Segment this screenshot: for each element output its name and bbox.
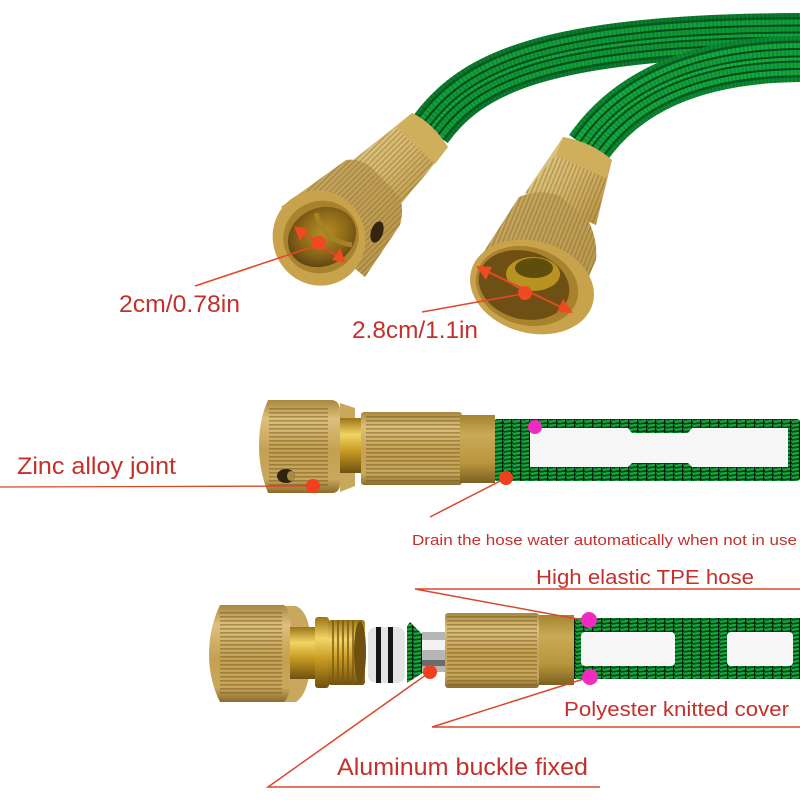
leader line [0, 486, 312, 487]
aluminum buckle [422, 632, 448, 672]
threaded fitting [290, 617, 366, 688]
leader line [430, 478, 506, 517]
dot [306, 479, 320, 493]
hose: front right [588, 59, 800, 148]
label: 2.8cm: 2.8cm/1.1in [352, 317, 478, 344]
dot [581, 612, 597, 628]
hose: back left [430, 35, 800, 130]
callout: zinc alloy joint [0, 453, 320, 493]
label: 2cm: 2cm/0.78in [119, 291, 240, 318]
arrowheads and dot [294, 226, 346, 263]
label: Aluminum buckle fixed [337, 754, 588, 781]
label: Polyester knitted cover [564, 699, 789, 721]
callout: 2.8cm diameter [352, 266, 573, 344]
collar [209, 605, 311, 702]
assembled connector and cutaway hose [259, 400, 800, 493]
leader line and arrows [422, 268, 569, 312]
inner tube windows [581, 632, 793, 666]
label: Drain the hose water automatically when not in use [412, 533, 797, 549]
arrowheads and dot [476, 266, 573, 313]
dot [499, 471, 513, 485]
knit end [407, 622, 424, 683]
leader lines [268, 672, 600, 787]
sleeve [445, 613, 574, 688]
callout: aluminum buckle fixed [268, 665, 600, 787]
leader lines [432, 677, 800, 727]
o-rings [368, 627, 405, 683]
hose cover [494, 419, 800, 481]
dot [582, 669, 598, 685]
callout: drain [412, 471, 797, 549]
brass joint [259, 400, 495, 493]
connector: left 2cm [257, 113, 448, 301]
leader line and arrows [195, 229, 343, 286]
callout: polyester knitted cover [432, 669, 800, 727]
dot: pink [528, 420, 542, 434]
leader lines [415, 589, 800, 620]
exploded connector and cutaway hose [209, 605, 800, 702]
label: Zinc alloy joint [17, 453, 176, 480]
dot [423, 665, 437, 679]
top hoses with connectors [257, 35, 800, 348]
label: High elastic TPE hose [536, 567, 754, 589]
hose cover [572, 618, 800, 679]
inner TPE tube [530, 428, 788, 467]
connector: right 2.8cm [459, 137, 612, 348]
callout: high elastic TPE hose [415, 567, 800, 628]
callout: 2cm diameter [119, 226, 346, 318]
